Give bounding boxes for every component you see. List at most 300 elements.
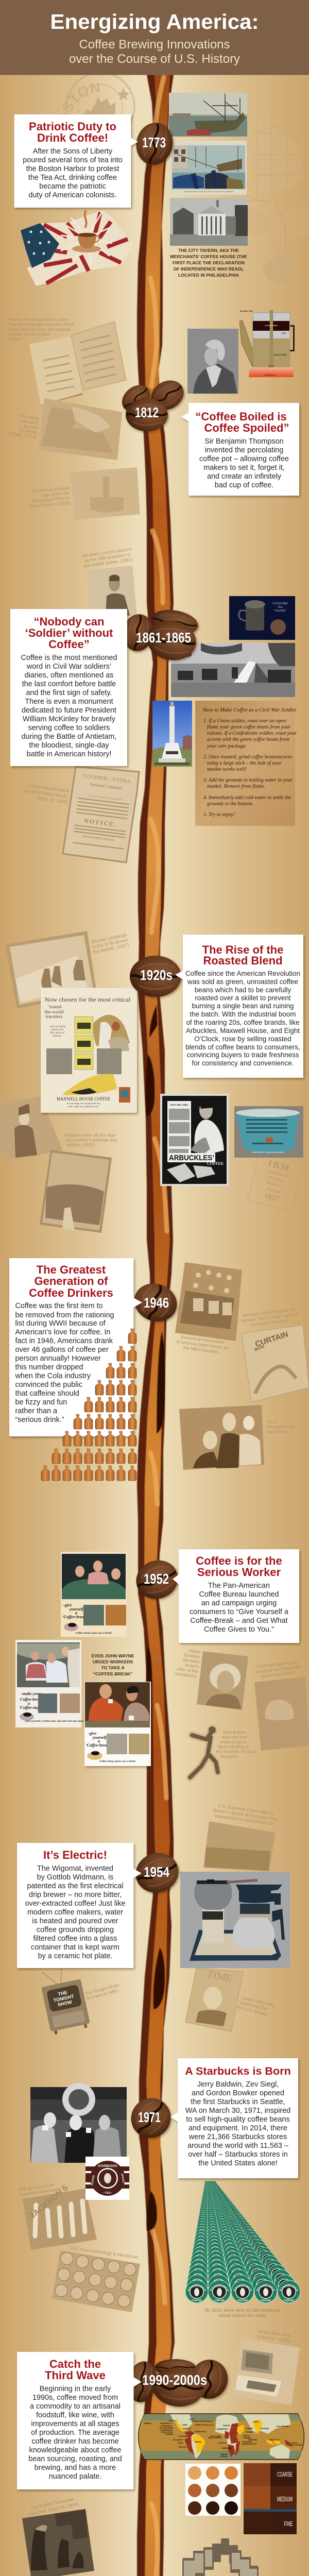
diagram: percolator: Heat Source [265,374,276,376]
panel: Catch the Third Wave: Catch the [49,2358,101,2370]
panel: The Rise of the Roasted Blend: was sold as green, unroasted coffee [187,978,298,986]
panel: How to Make Coffee as a Civil War Soldier [195,701,298,826]
image: Coffee-break ad 1: –give [62,1603,72,1607]
panel: The Greatest Generation of Coffee Drinkers: when the Cola industry [14,1372,91,1380]
panel: A Starbucks is Born: to sell high-quality coffee beans [186,2115,290,2124]
faint caption: Hubble: launched. (April 24, 1990) [28,2501,79,2517]
faint caption: Lincoln assassinated: Lincoln assassinated [28,783,70,793]
faint caption: Star Spangled Banner: The Star Spangled Banner (1814) [8,321,75,327]
photo: Civil War mucket: “mucket” [274,609,286,613]
panel: Catch the Third Wave: foodstuff, like wine, with [36,2411,114,2419]
panel: How to Make Coffee as a Civil War Soldier: 5. Try to enjoy! [203,812,235,818]
panel: The Greatest Generation of Coffee Drinkers: that caffeine should [15,1389,79,1398]
icon: faint tea bag on string [262,204,293,286]
panel: How to Make Coffee as a Civil War Soldier: 1. If a Union soldier, roast over an open [203,718,286,724]
faint caption: hydrogen bomb: tested at the Enewetak [255,1664,301,1674]
chart: stack of Starbucks logos [185,2181,301,2303]
bean marker: 1812 [117,375,189,431]
image: faint Lincoln assassination newspaper: ON THE PUBLIC SQUARE, [82,836,115,842]
panel: How to Make Coffee as a Civil War Soldier: grounds to the bottom. [207,801,253,807]
photo: Boston Tea Party painting [169,93,247,137]
year label: 1954: 1954 [144,1864,169,1880]
icon: faint Boston postmark stamp [61,75,135,123]
panel: Coffee Boiled is Coffee Spoiled: Sir Benjamin Thompson [204,437,284,446]
image: faint White House burning [39,398,122,460]
chart: stack of Starbucks logos: COFFEE [261,2299,271,2302]
image: faint CAT scan grid [52,2250,140,2312]
image: Maxwell House advertisement: – this rich blend [48,1026,66,1028]
panel: The Rise of the Roasted Blend: Arbuckles, Maxwell House, and Eight [186,1027,300,1035]
bean marker: 1946 [129,1278,182,1327]
panel: Catch the Third Wave: Beginning in the early [40,2385,111,2393]
image: John Wayne Coffee-break caption: TO TAKE A [101,1665,125,1670]
panel: Coffee Boiled is Coffee Spoiled: makers to set it, forget it, [203,464,285,472]
panel: Catch the Third Wave: of production. The average [31,2429,119,2437]
panel: Nobody can Soldier without Coffee: ‘Soldier’ without [25,626,113,639]
faint caption: White House burned: Troops. (1814) [8,430,37,439]
chart: stack of Starbucks logos: COFFEE [192,2299,202,2302]
panel: The Greatest Generation of Coffee Drinkers: be removed from the rationing [15,1311,114,1319]
faint caption: Einstein: offer of the [177,1666,198,1674]
map: coffee growing regions: PHILIPPINES [277,2426,289,2428]
panel: How to Make Coffee as a Civil War Soldier: 3. Add the grounds to boiling water in your [203,777,293,783]
panel: Coffee is for the Serious Worker: Serious Worker [197,1566,281,1579]
panel: Coffee is for the Serious Worker: Coffee Bureau launched [199,1590,279,1599]
photo caption: City Tavern: FIRST PLACE THE DECLARATION [173,260,245,265]
map: coffee growing regions [138,2414,304,2460]
icon: faint television [38,1965,91,2035]
image: Arbuckles advertisement [160,1094,229,1186]
faint caption: Lincoln sworn in: as the 18th president of [84,552,131,563]
panel: Coffee Boiled is Coffee Spoiled [181,403,299,496]
faint caption: Basketball Association: the NBA) founded. [183,1345,220,1354]
panel: How to Make Coffee as a Civil War Soldier: musket. Remove from flame. [207,784,265,789]
faint caption: first steamboat: sails down the [41,490,70,498]
panel: Catch the Third Wave: improvements at all stages [31,2420,119,2428]
panel: The Greatest Generation of Coffee Drinkers: The Greatest [37,1263,106,1276]
map: coffee growing regions: BOLIVIA [179,2446,187,2448]
image: Maxwell House advertisement: It is pleasing more people than any [66,1102,100,1105]
image: Maxwell House advertisement: ’round- [48,1005,62,1010]
faint caption: Star Spangled Banner: States. [8,336,22,342]
panel: Nobody can Soldier without Coffee: serving coffee to soldiers [28,724,110,732]
image: Maxwell House advertisement: the-world [45,1010,64,1015]
faint caption: White House burned: House is [21,418,39,426]
image: Coffee-break ad 2: –make your [20,1691,41,1696]
panel: The Greatest Generation of Coffee Drinkers: be fizzy and fun [15,1398,67,1406]
map: coffee growing regions: SOUTH [220,2453,228,2455]
icon: faint television: THE [58,1990,67,1997]
panel: The Rise of the Roasted Blend: beans which had to be carefully [195,986,291,994]
panel: The Greatest Generation of Coffee Drinkers: Generation of [34,1275,108,1287]
chart: stack of Starbucks logos: COFFEE [214,2299,225,2302]
map: coffee growing regions: PERU [178,2442,183,2444]
image: faint Brown v. Board crowd [203,1821,276,1871]
image: faint IBM stamp [248,1153,303,1211]
faint caption: McCarthy: the U.S. Senate. [236,2004,269,2017]
panel: Catch the Third Wave: Third Wave [45,2369,106,2382]
panel: Patriotic Duty to Drink Coffee: became the patriotic [39,182,106,191]
faint caption: Lindbergh: the Atlantic. (1927) [93,942,130,955]
panel: Nobody can Soldier without Coffee: Coffee is the most mentioned [21,654,117,662]
photo caption: City Tavern: MERCHANTS’ COFFEE HOUSE (THE [170,254,247,259]
faint caption: Einstein: presidency. [175,1671,198,1679]
image: Hubble pillars of creation [22,2509,94,2576]
year label: 1952: 1952 [144,1571,169,1587]
image: faint Lincoln assassination newspaper [63,767,139,862]
image: John Wayne Coffee-break caption: “COFFEE-BREAK” [93,1671,132,1676]
panel: How to Make Coffee as a Civil War Soldier: 4. Immediately add cold water to settle the [203,795,291,801]
faint caption: White House burned: The White [19,413,40,421]
image: Coffee-break ad 3 with John Wayne: Coffee always gives you a break! [99,1760,136,1762]
panel: The Rise of the Roasted Blend: The Rise of the [202,943,283,956]
panel: The Rise of the Roasted Blend: the batch. With the industrial boom [190,1010,296,1018]
panel: The Greatest Generation of Coffee Drinkers: “serious drink.” [15,1416,64,1424]
faint caption: Lincoln sworn in: Abraham Lincoln sworn in [81,546,132,558]
panel: Patriotic Duty to Drink Coffee: the Boston Harbor to protest [26,165,119,173]
faint caption: flappers: Flappers were all the rage [64,1132,116,1138]
panel: It's Electric: over-extracted coffee! Just like [25,1900,125,1908]
panel: Patriotic Duty to Drink Coffee: Drink Coffee! [37,131,108,144]
panel: Nobody can Soldier without Coffee: the bloodiest, single-day [29,741,109,750]
bean marker: 1773 [132,120,177,168]
photo: City Tavern [170,198,248,246]
faint caption: Einstein: Albert [188,1648,201,1654]
panel: Coffee is for the Serious Worker: Coffee is for the [196,1554,282,1567]
image: faint Lincoln assassination newspaper: National Calamity! [90,782,124,791]
panel: How to Make Coffee as a Civil War Soldier: flame your green coffee beans from your [207,724,290,730]
photo: Destruction of tea at Boston Harbor: THE DESTRUCTION OF TEA AT BOSTON HARBOR [184,191,233,193]
image: faint vintage computer [233,2338,300,2405]
image: Coffee-break ad 3 with John Wayne: ‘Coffee-break’! [85,1743,112,1748]
panel: Coffee is for the Serious Worker: consumers to “Give Yourself a [190,1608,288,1616]
map: coffee growing regions: CAMEROON [216,2428,228,2430]
photo: Antietam monument [152,701,192,767]
map: coffee growing regions: EL SALVADOR [160,2427,174,2429]
image: coffee grind sizes [244,2463,297,2534]
faint caption: Lindbergh: is first to fly across [92,937,128,950]
panel: It's Electric: coffee grounds dripping [37,1926,114,1934]
faint caption: Tonight Show: first airs on NBC. [86,1988,120,2001]
image: Coffee-break ad 2: a [28,1701,30,1706]
map: coffee growing regions: BURUNDI [248,2439,258,2441]
map: coffee growing regions: AFRICA [220,2455,228,2458]
faint caption: flappers: and women’s suffrage was [65,1138,117,1143]
panel: Catch the Third Wave: knowledgeable about coffee [29,2446,121,2454]
map: coffee growing regions: ZIMBABWE [221,2447,232,2449]
photo: Sir Benjamin Thompson engraving [187,329,238,394]
image: Coffee-break ad 2: Coffee-break [20,1697,42,1702]
map: coffee growing regions: VENEZUELA [195,2431,207,2433]
panel: Coffee Boiled is Coffee Spoiled: coffee pot – allowing coffee [199,455,289,463]
faint caption: White House burned: by British [19,427,38,435]
image: bean roast levels grid [185,2464,241,2516]
panel: The Greatest Generation of Coffee Drinkers [9,1258,142,1436]
image: faint sheet music [29,321,126,405]
panel: Catch the Third Wave [17,2352,142,2489]
image: coffee grind sizes: FINE [284,2520,293,2528]
panel: The Greatest Generation of Coffee Drinkers: Coffee Drinkers [29,1286,113,1299]
panel: Coffee Boiled is Coffee Spoiled: invented the percolating [205,446,283,454]
panel: Patriotic Duty to Drink Coffee [14,114,138,208]
year label: 1971: 1971 [138,2109,161,2125]
image: Arbuckles advertisement: Serve this coffee [170,1104,188,1107]
diagram: percolator: Filter [282,332,286,334]
faint caption: hydrogen bomb: First hydrogen bomb [257,1659,298,1669]
image: faint Iron Curtain cartoon: CURTAIN [254,1330,289,1349]
panel: The Greatest Generation of Coffee Drinkers: Coffee was the first item to [15,1302,103,1310]
panel: A Starbucks is Born [170,2058,298,2178]
map: coffee growing regions: INDONESIA [269,2439,280,2441]
image: Coffee-break ad 1: Coffee always gives you a break! [76,1632,112,1634]
faint caption: McCarthy: Joseph McCarthy [241,1995,276,2008]
map: coffee growing regions: COSTA RICA [161,2431,173,2433]
icon: original Starbucks logo: COFFEE [91,2175,96,2185]
bean marker: 1861-1865 [119,606,200,664]
year label: 1990-2000s: 1990-2000s [142,2372,207,2388]
panel: Coffee is for the Serious Worker: an ad campaign urging [201,1599,277,1607]
image: Coffee-break ad 1: a [75,1611,77,1615]
panel: Coffee Boiled is Coffee Spoiled: Coffee Spoiled” [204,421,289,434]
faint caption: White House burned: burned [24,423,39,430]
panel: It's Electric: by Gottlob Widmann, is [37,1873,113,1882]
panel: The Greatest Generation of Coffee Drinkers: over 46 gallons of coffee per [15,1346,109,1354]
image: faint Einstein [197,1651,248,1710]
panel: The Greatest Generation of Coffee Drinkers: fact in 1946, Americans drank [15,1337,113,1345]
panel: The Rise of the Roasted Blend: Roasted Blend [203,954,283,967]
faint caption: Brown v. Board: segregation is unconstitutional. [214,1813,275,1826]
image: faint IBM stamp: -International- [265,1168,290,1179]
chart: stack of Starbucks logos: STARBUCKS [256,2285,275,2292]
panel: How to Make Coffee as a Civil War Soldier: acorns with the green coffee beans from [207,737,289,742]
panel: The Greatest Generation of Coffee Drinkers: convinced the public [15,1381,82,1389]
panel: It's Electric: is heated and poured over [32,1917,118,1925]
bean marker: 1954 [130,1847,184,1899]
caption: Starbucks stores stat: stores around the world. [219,2313,267,2318]
panel: Patriotic Duty to Drink Coffee: After the Sons of Liberty [33,147,113,156]
image: faint IBM stamp: founded [266,1187,280,1194]
image: Coffee-break ad 1 [61,1552,127,1637]
photo: Destruction of tea at Boston Harbor [170,141,247,195]
panel: A Starbucks is Born: around the world with 11,563 – [187,2142,288,2150]
panel: Patriotic Duty to Drink Coffee: duty of American colonists. [28,191,117,199]
faint caption: Basketball Association: Basketball Association [181,1334,225,1345]
chart: stack of Starbucks logos: COFFEE [237,2299,248,2302]
faint caption: Jackson 5: The Jackson 5 are [19,2182,55,2192]
icon: original Starbucks logo: STARBUCKS [98,2165,117,2168]
faint caption: It's a Wonderful Life: Wonderful Life” [266,1424,296,1429]
map: coffee growing regions: SAO TOME [210,2435,221,2437]
map: coffee growing regions: NICARAGUA [161,2429,173,2431]
image: Maxwell House advertisement [41,988,137,1113]
photo caption: City Tavern: OF INDEPENDENCE WAS READ), [174,266,244,272]
panel: Catch the Third Wave: coffee drinker has become [31,2437,119,2446]
photo: blue coffee can: THE THREE-FOLD FLAVOR SECRET [250,1114,286,1117]
faint caption: It's a Wonderful Life: was filmed. [266,1429,288,1434]
image: faint Lincoln portrait [87,566,137,616]
image: Maxwell House advertisement: first choice of [50,1032,64,1035]
panel: Coffee Boiled is Coffee Spoiled: bad cup of coffee. [215,481,273,489]
panel: Coffee is for the Serious Worker: Coffee-Break – and Get What [190,1617,288,1625]
map: coffee growing regions: TANZANIA [242,2441,252,2443]
image: faint Lindbergh photo [5,931,97,1009]
icon: original Starbucks logo [85,2157,129,2200]
faint caption: Jackson 5: a national obsession. [20,2186,61,2197]
coffee stream [136,75,175,2576]
panel: Coffee is for the Serious Worker: Coffee Gives to You.” [204,1625,274,1634]
faint caption: Dick Button: Olympics. [220,1754,239,1759]
map: coffee growing regions: PANAMA [165,2433,174,2435]
map: coffee growing regions: JAMAICA [182,2428,192,2430]
map: coffee growing regions: GUATEMALA [160,2422,172,2425]
image: faint suffrage crowd [40,1150,112,1233]
diagram: percolator: Spreader Plate [240,310,253,312]
image: coffee grind sizes: MEDIUM [277,2495,293,2503]
faint caption: Hubble: The Hubble Telescope [30,2496,74,2511]
image: Coffee-break ad 3 with John Wayne [84,1682,151,1766]
faint caption: It's a Wonderful Life: “It’s a [266,1419,277,1425]
image: faint Time cover: TIME [206,1968,233,1985]
panel: The Rise of the Roasted Blend: convincing buyers to trade freshness [186,1051,299,1059]
header banner: over the Course of U.S. History [69,52,240,66]
year label: 1861-1865: 1861-1865 [136,630,191,646]
image: faint IBM stamp: -Business- [267,1175,285,1183]
panel: The Greatest Generation of Coffee Drinkers: list during WWII because of [15,1319,106,1328]
panel: The Rise of the Roasted Blend: of the roaring 20s, coffee brands, like [186,1019,300,1026]
panel: It's Electric: modern coffee makers, water [27,1908,123,1917]
header banner: Energizing America: [50,10,259,33]
panel: Catch the Third Wave: a commodity to an artisanal [30,2402,121,2411]
faint caption: Basketball Association: of America (later known as [176,1339,228,1350]
faint caption: first steamboat: New Orleans. (1812) [29,500,71,509]
panel: Patriotic Duty to Drink Coffee: poured several tons of tea into [23,156,123,164]
chart: stack of Starbucks logos: COFFEE [284,2299,295,2302]
faint caption: McCarthy: condemned by [238,1999,268,2011]
diagram: percolator: Brewed Coffee [274,354,287,356]
panel: How to Make Coffee as a Civil War Soldier: How to Make Coffee as a Civil War Soldier [202,707,297,713]
image: John Wayne Coffee-break caption: URGED WORKERS [93,1659,133,1664]
image: faint Lincoln assassination newspaper: COURIER—EXTRA. [83,773,132,785]
panel: Nobody can Soldier without Coffee: word in Civil War soldiers’ [26,663,111,671]
panel: A Starbucks is Born: Jerry Baldwin, Zev Siegl, [197,2080,279,2089]
panel: A Starbucks is Born: A Starbucks is Born [185,2064,291,2077]
faint caption: flappers: ratified. (1920) [66,1142,95,1147]
faint caption: Dick Button: the Helsinki, Finland [216,1749,256,1754]
chart: pyramid of coffee jugs [41,1329,136,1481]
header banner [0,0,309,75]
image: Coffee-break ad 3 with John Wayne: yourself [92,1735,107,1740]
panel: A Starbucks is Born: and Gordon Bowker opened [192,2089,284,2097]
faint caption: Star Spangled Banner: anthem of the United [8,332,49,337]
chart: stack of Starbucks logos: STARBUCKS [233,2285,252,2292]
image: Maxwell House advertisement: America [53,1035,62,1038]
panel: Patriotic Duty to Drink Coffee: the Tea Act, drinking coffee [28,174,117,182]
panel: Catch the Third Wave: nuanced palate. [49,2472,101,2481]
map: coffee growing regions: HONDURAS [161,2425,172,2427]
map: coffee growing regions: VIETNAM [260,2428,269,2430]
image: Maxwell House advertisement: other coffee ever offered for sale [68,1105,99,1108]
faint caption: Lincoln assassinated: by John Wilkes Booth. [25,788,68,799]
faint caption: Dick Button: Dick Button [223,1730,246,1735]
icon: original Starbucks logo: SPICES [120,2173,125,2183]
map: coffee growing regions: BRAZIL [195,2441,202,2443]
panel: A Starbucks is Born: WA on March 30, 1971, inspired [185,2107,290,2115]
map: coffee growing regions: MEXICO [169,2420,177,2422]
panel: A Starbucks is Born: and equipment. In 2014, there [188,2124,287,2132]
panel: The Rise of the Roasted Blend [175,935,303,1078]
image: faint Wonderful Life still [179,1405,264,1470]
map: coffee growing regions: ECUADOR [173,2439,183,2441]
panel: How to Make Coffee as a Civil War Soldier: 2. Once roasted, grind coffee beans/acorns [203,754,292,760]
image: John Wayne Coffee-break caption: EVEN JOHN WAYNE [92,1653,134,1658]
bean marker: 1920s [130,956,181,997]
faint caption: first steamboat: Mississippi River to [32,495,70,503]
faint caption: Einstein: Einstein [184,1652,200,1659]
map: coffee growing regions: MADAGASCAR [242,2443,256,2445]
image: faint Iron Curtain cartoon [242,1325,309,1402]
image: faint basketball team [175,1262,242,1341]
image: faint IBM stamp: 1927 [264,1192,279,1204]
panel: Nobody can Soldier without Coffee: There is even a monument [25,698,113,706]
panel: Nobody can Soldier without Coffee: dedicated to future President [22,706,116,715]
panel: It's Electric: container that is kept warm [31,1943,119,1952]
panel: How to Make Coffee as a Civil War Soldier: using a large stick – the butt of your [207,760,282,766]
panel: How to Make Coffee as a Civil War Soldier: rations. If a Confederate soldier, roast your [207,731,297,736]
panel: The Greatest Generation of Coffee Drinkers: this number dropped [15,1363,83,1371]
image: Coffee-break ad 1: ‘Coffee-break’! [62,1615,89,1619]
faint caption: World Wide Web: World Wide Web [258,2329,291,2338]
faint caption: World Wide Web: “goes live.” (1991) [255,2333,291,2344]
panel: How to Make Coffee as a Civil War Soldier: musket works well! [207,767,247,772]
year label: 1812: 1812 [135,404,159,420]
panel: It's Electric: filtered coffee into a glass [33,1935,117,1943]
image: faint Lincoln assassination newspaper: Lincoln & Seward Assassinated!! [88,794,123,802]
faint caption: Tonight Show: The Tonight Show [84,1982,120,1996]
panel: Nobody can Soldier without Coffee: during the Battle of Antietam, [22,733,116,741]
image: Coffee-break ad 2: –give yourself a Coffee-stop; stay alert and stay alive! [25,1720,84,1722]
faint caption: Iron Curtain: in Fulton, Missouri. [251,1318,289,1327]
map: coffee growing regions: AND PRINCIPE [208,2437,222,2439]
bean marker: 1990-2000s [124,2357,231,2409]
faint caption: Brown v. Board: Brown v. Board of Education that [213,1807,278,1822]
photo: blue coffee can: VITA-FRESH • VACUUM PACKED [252,1151,284,1154]
map: coffee growing regions: ANGOLA [218,2442,227,2444]
map: coffee growing regions: KENYA [243,2435,250,2437]
panel: It's Electric: The Wigomat, invented [37,1865,113,1873]
image: Coffee-break ad 1: yourself [69,1607,84,1612]
panel: Nobody can Soldier without Coffee: battle in American history! [27,750,111,758]
image: Coffee-break ad 3 with John Wayne: a [98,1739,100,1743]
image: Maxwell House advertisement: Now chosen for the most critical [44,996,131,1003]
photo: Wigomat coffee maker [180,1872,290,1968]
panel: It's Electric: It’s Electric! [43,1849,107,1861]
photo: Starbucks founders [30,2083,127,2163]
map: coffee growing regions: ETHIOPIA [246,2431,255,2433]
faint caption: Dick Button: figure skating at [218,1744,249,1749]
icon: figure skater silhouette [190,1725,218,1777]
panel: The Greatest Generation of Coffee Drinkers: rather than a [15,1407,57,1415]
map: coffee growing regions: INDIA [253,2421,259,2423]
faint caption: Dick Button: triple jump in [221,1739,246,1744]
faint caption: Iron Curtain: famous “Iron Curtain” speech [241,1311,299,1324]
bean marker: 1952 [131,1554,183,1605]
map: coffee growing regions: PUERTO RICO (U.S.) [195,2424,214,2426]
panel: Nobody can Soldier without Coffee: “Nobody can [34,615,104,628]
icon: faint television: SHOW [57,1999,73,2007]
image: Coffee-break ad 2: ‘Coffee-stop’! [19,1705,43,1710]
image: Coffee-break ad 2 [15,1640,84,1727]
faint caption: Iron Curtain: Winston Churchill gives his [243,1307,296,1318]
